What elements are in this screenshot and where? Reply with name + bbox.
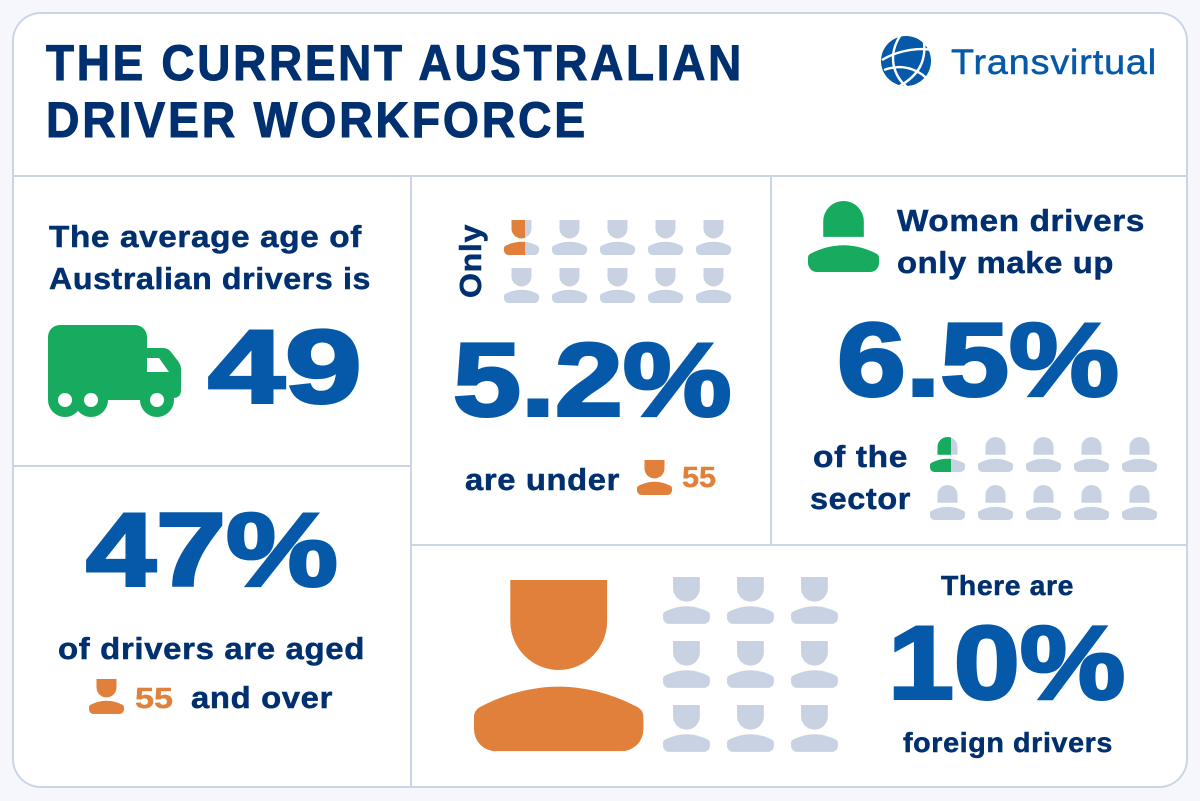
- text: Only: Only: [453, 224, 488, 298]
- stat: 10%: 10%: [888, 604, 1125, 721]
- text: are under: are under: [465, 462, 620, 497]
- icon: orange person: [637, 460, 672, 495]
- panel: average age: [48, 219, 371, 425]
- text: women drivers: only make up: [897, 245, 1114, 280]
- text: average age intro: The average age of: [49, 219, 362, 254]
- panel: aged 55 and over: [58, 493, 365, 715]
- stat: 6.5%: 6.5%: [837, 303, 1119, 418]
- panel: women drivers: [808, 201, 1157, 520]
- title: [46, 35, 744, 148]
- panel: under 55: [453, 220, 732, 497]
- stat: 5.2%: 5.2%: [453, 322, 732, 438]
- icon: large orange person: [474, 580, 643, 751]
- text: of drivers are aged: of drivers are aged: [58, 631, 365, 666]
- icon grid: under 55 share: [504, 220, 731, 303]
- text: foreign drivers: foreign drivers: [903, 727, 1113, 758]
- text: 55: 55: [682, 462, 716, 494]
- icon: globe: [881, 36, 932, 88]
- logo: Transvirtual: [881, 36, 1157, 88]
- title: THE CURRENT AUSTRALIAN: [46, 35, 744, 91]
- panel: foreign drivers: [474, 570, 1125, 758]
- icon grid: foreign drivers: [663, 577, 838, 752]
- icon: truck: [48, 325, 181, 417]
- text: of the sector: sector: [810, 481, 911, 516]
- icon grid: women share: [930, 437, 1157, 520]
- text: there are: There are: [941, 570, 1074, 601]
- text: of the sector: [810, 439, 911, 516]
- text: of the sector: of the: [813, 439, 908, 474]
- text: average age intro: [49, 219, 371, 296]
- icon: green person: [808, 201, 879, 272]
- text: average age intro: Australian drivers is: [49, 261, 371, 296]
- text: women drivers: [897, 203, 1145, 280]
- text: and over: and over: [191, 680, 333, 715]
- text: 55: 55: [135, 683, 173, 715]
- stat: 47%: 47%: [86, 493, 338, 608]
- icon: orange person: [89, 679, 124, 714]
- logo wordmark: Transvirtual: [951, 43, 1157, 82]
- title: DRIVER WORKFORCE: [46, 92, 588, 148]
- stat: 49: 49: [208, 308, 362, 425]
- text: women drivers: Women drivers: [897, 203, 1145, 238]
